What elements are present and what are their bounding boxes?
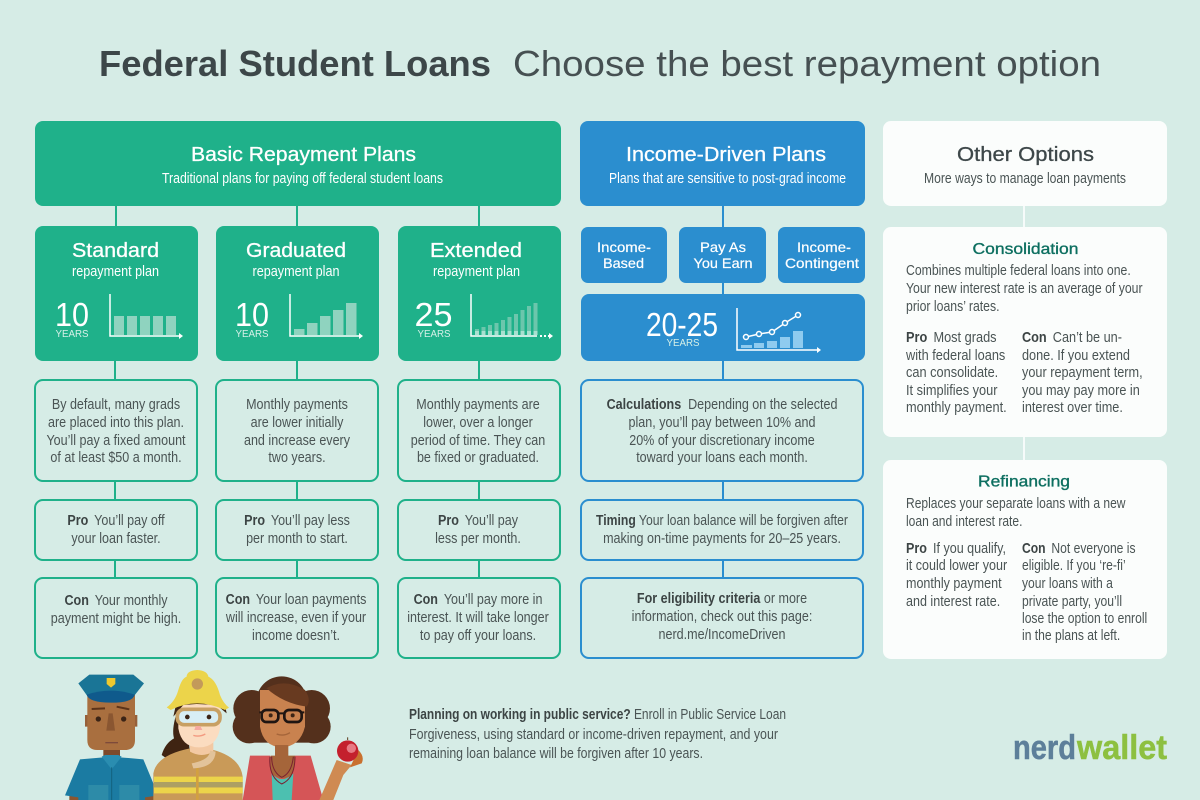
chart: flat payments (110, 294, 183, 339)
panel: standard plan: repayment plan (72, 264, 159, 280)
panel: timing: Timing Your loan balance will be forgiven after (596, 512, 848, 528)
panel: consolidation: your repayment term, (1022, 364, 1143, 380)
panel: income-contingent: Income- (797, 239, 851, 255)
panel: extended description (398, 380, 560, 481)
panel: consolidation: prior loans’ rates. (906, 298, 1000, 314)
panel: consolidation: Your new interest rate is an average of your (906, 280, 1143, 296)
panel: basic repayment plans header (35, 121, 561, 206)
panel: graduated description: two years. (268, 449, 326, 465)
panel: basic repayment plans header: Traditional plans for paying off federal student loans (162, 171, 443, 187)
panel: 20-25 years: 20-25 (646, 306, 718, 343)
panel: standard plan: 10 (55, 296, 89, 333)
panel: calculations (581, 380, 863, 481)
panel: extended description: lower, over a longer (423, 414, 533, 430)
icon: firefighter (153, 670, 243, 800)
panel: graduated description: and increase every (244, 432, 350, 448)
chart: rising payments (290, 294, 363, 339)
panel: income-based (581, 227, 667, 283)
title: Federal Student Loans (99, 43, 491, 84)
panel: consolidation: monthly payment. (906, 399, 1007, 415)
panel: extended pro: less per month. (435, 530, 521, 546)
panel: graduated pro (216, 500, 378, 560)
panel: calculations: plan, you’ll pay between 10% and (629, 414, 815, 430)
panel: standard con: payment might be high. (51, 610, 181, 626)
panel: consolidation (883, 227, 1167, 437)
panel: refinancing: lose the option to enroll (1022, 610, 1147, 626)
panel: extended con: to pay off your loans. (420, 627, 536, 643)
panel: other options header: Other Options (957, 144, 1094, 166)
panel: extended con: Con You’ll pay more in (414, 591, 542, 607)
callout: public service: Planning on working in public service? Enroll in Public Service Loan (409, 707, 786, 723)
panel: 20-25 years: YEARS (666, 338, 700, 349)
panel: eligibility: nerd.me/IncomeDriven (659, 626, 785, 642)
panel: graduated plan: repayment plan (252, 264, 340, 280)
icon: police officer (65, 675, 158, 800)
panel: refinancing: eligible. If you ‘re-fi’ (1022, 557, 1126, 573)
panel: standard pro: Pro You’ll pay off (67, 512, 165, 528)
panel: extended plan: Extended (430, 240, 522, 262)
logo: nerdwallet (1013, 729, 1167, 767)
panel: refinancing: Replaces your separate loans with a new (906, 495, 1126, 511)
panel: calculations: toward your loans each month. (636, 449, 808, 465)
panel: graduated plan: Graduated (246, 240, 346, 262)
panel: extended description: be fixed or graduated. (417, 449, 539, 465)
panel: refinancing: Refinancing (978, 474, 1070, 490)
panel: eligibility: information, check out this page: (632, 608, 812, 624)
panel: pay as you earn (679, 227, 766, 283)
panel: basic repayment plans header: Basic Repayment Plans (191, 144, 416, 166)
panel: graduated description (216, 380, 378, 481)
panel: graduated plan: YEARS (236, 329, 269, 340)
panel: eligibility (581, 578, 863, 658)
panel: graduated con: will increase, even if your (225, 609, 367, 625)
icon: teacher (233, 676, 363, 800)
panel: standard plan: YEARS (56, 329, 89, 340)
panel: refinancing: it could lower your (906, 557, 1008, 573)
panel: consolidation: It simplifies your (906, 382, 998, 398)
panel: extended plan: 25 (414, 296, 452, 333)
panel: graduated con: Con Your loan payments (226, 591, 367, 607)
callout: public service (409, 707, 786, 762)
panel: income-contingent (778, 227, 865, 283)
panel: refinancing: private party, you’ll (1022, 593, 1122, 609)
panel: extended plan (398, 226, 561, 361)
panel: refinancing: Con Not everyone is (1022, 540, 1136, 556)
panel: consolidation: done. If you extend (1022, 347, 1130, 363)
panel: graduated description: Monthly payments (246, 396, 348, 412)
panel: pay as you earn: Pay As (700, 239, 746, 255)
panel: consolidation: interest over time. (1022, 399, 1123, 415)
panel: extended con (398, 578, 560, 658)
panel: extended plan: YEARS (418, 329, 451, 340)
chart: income-driven (737, 308, 821, 353)
panel: standard plan: Standard (72, 240, 159, 262)
panel: consolidation: Combines multiple federal loans into one. (906, 262, 1131, 278)
panel: refinancing: your loans with a (1022, 575, 1113, 591)
panel: consolidation: can consolidate. (906, 364, 998, 380)
panel: refinancing (883, 460, 1167, 659)
panel: graduated description: are lower initially (251, 414, 344, 430)
panel: refinancing: in the plans at left. (1022, 627, 1120, 643)
panel: income-driven plans header (580, 121, 865, 206)
panel: consolidation: you may pay more in (1022, 382, 1140, 398)
panel: extended description: Monthly payments are (416, 396, 540, 412)
panel: standard con (35, 578, 197, 658)
panel: 20-25 years (581, 294, 865, 361)
panel: graduated pro: Pro You’ll pay less (244, 512, 350, 528)
panel: standard pro: your loan faster. (71, 530, 161, 546)
panel: graduated con (216, 578, 378, 658)
panel: income-based: Income- (597, 239, 651, 255)
panel: other options header (883, 121, 1167, 206)
panel: income-based: Based (603, 255, 644, 271)
panel: extended pro (398, 500, 560, 560)
panel: standard description: You’ll pay a fixed amount (46, 432, 186, 448)
panel: extended description: period of time. They can (411, 432, 545, 448)
panel: standard con: Con Your monthly (64, 592, 168, 608)
panel: standard description: of at least $50 a month. (50, 449, 182, 465)
panel: income-driven plans header: Income-Driven Plans (626, 144, 826, 166)
panel: standard pro (35, 500, 197, 560)
panel: other options header: More ways to manage loan payments (924, 171, 1126, 187)
logo: nerdwallet: nerd (1013, 729, 1076, 767)
panel: timing (581, 500, 863, 560)
panel: standard plan (35, 226, 198, 361)
panel: refinancing: monthly payment (906, 575, 1002, 591)
logo: nerdwallet: wallet (1076, 729, 1167, 767)
panel: standard description: are placed into this plan. (48, 414, 184, 430)
panel: refinancing: Pro If you qualify, (906, 540, 1006, 556)
panel: refinancing: loan and interest rate. (906, 513, 1022, 529)
panel: extended plan: repayment plan (433, 264, 520, 280)
panel: extended pro: Pro You’ll pay (438, 512, 518, 528)
panel: graduated plan (216, 226, 379, 361)
panel: consolidation: Con Can’t be un- (1022, 329, 1122, 345)
panel: calculations: 20% of your discretionary income (629, 432, 815, 448)
panel: calculations: Calculations Depending on the selected (607, 396, 837, 412)
panel: refinancing: and interest rate. (906, 593, 1000, 609)
panel: income-contingent: Contingent (785, 255, 859, 271)
panel: consolidation: Consolidation (972, 241, 1078, 258)
title: Choose the best repayment option (513, 43, 1101, 84)
panel: timing: making on-time payments for 20–25 years. (603, 530, 841, 546)
callout: public service: remaining loan balance will be forgiven after 10 years. (409, 746, 703, 762)
panel: standard description (35, 380, 197, 481)
panel: extended con: interest. It will take longer (407, 609, 549, 625)
panel: standard description: By default, many grads (52, 396, 180, 412)
panel: pay as you earn: You Earn (694, 255, 752, 271)
chart: long payments (471, 294, 553, 339)
panel: eligibility: For eligibility criteria or more (637, 590, 807, 606)
panel: consolidation: with federal loans (905, 347, 1005, 363)
title (99, 43, 1101, 84)
callout: public service: Forgiveness, using standard or income-driven repayment, and your (409, 727, 778, 743)
illustration: public service workers (65, 670, 363, 800)
panel: income-driven plans header: Plans that are sensitive to post-grad income (609, 171, 846, 187)
panel: graduated plan: 10 (235, 296, 269, 333)
panel: consolidation: Pro Most grads (906, 329, 997, 345)
panel: graduated con: income doesn’t. (252, 627, 340, 643)
panel: graduated pro: per month to start. (246, 530, 348, 546)
